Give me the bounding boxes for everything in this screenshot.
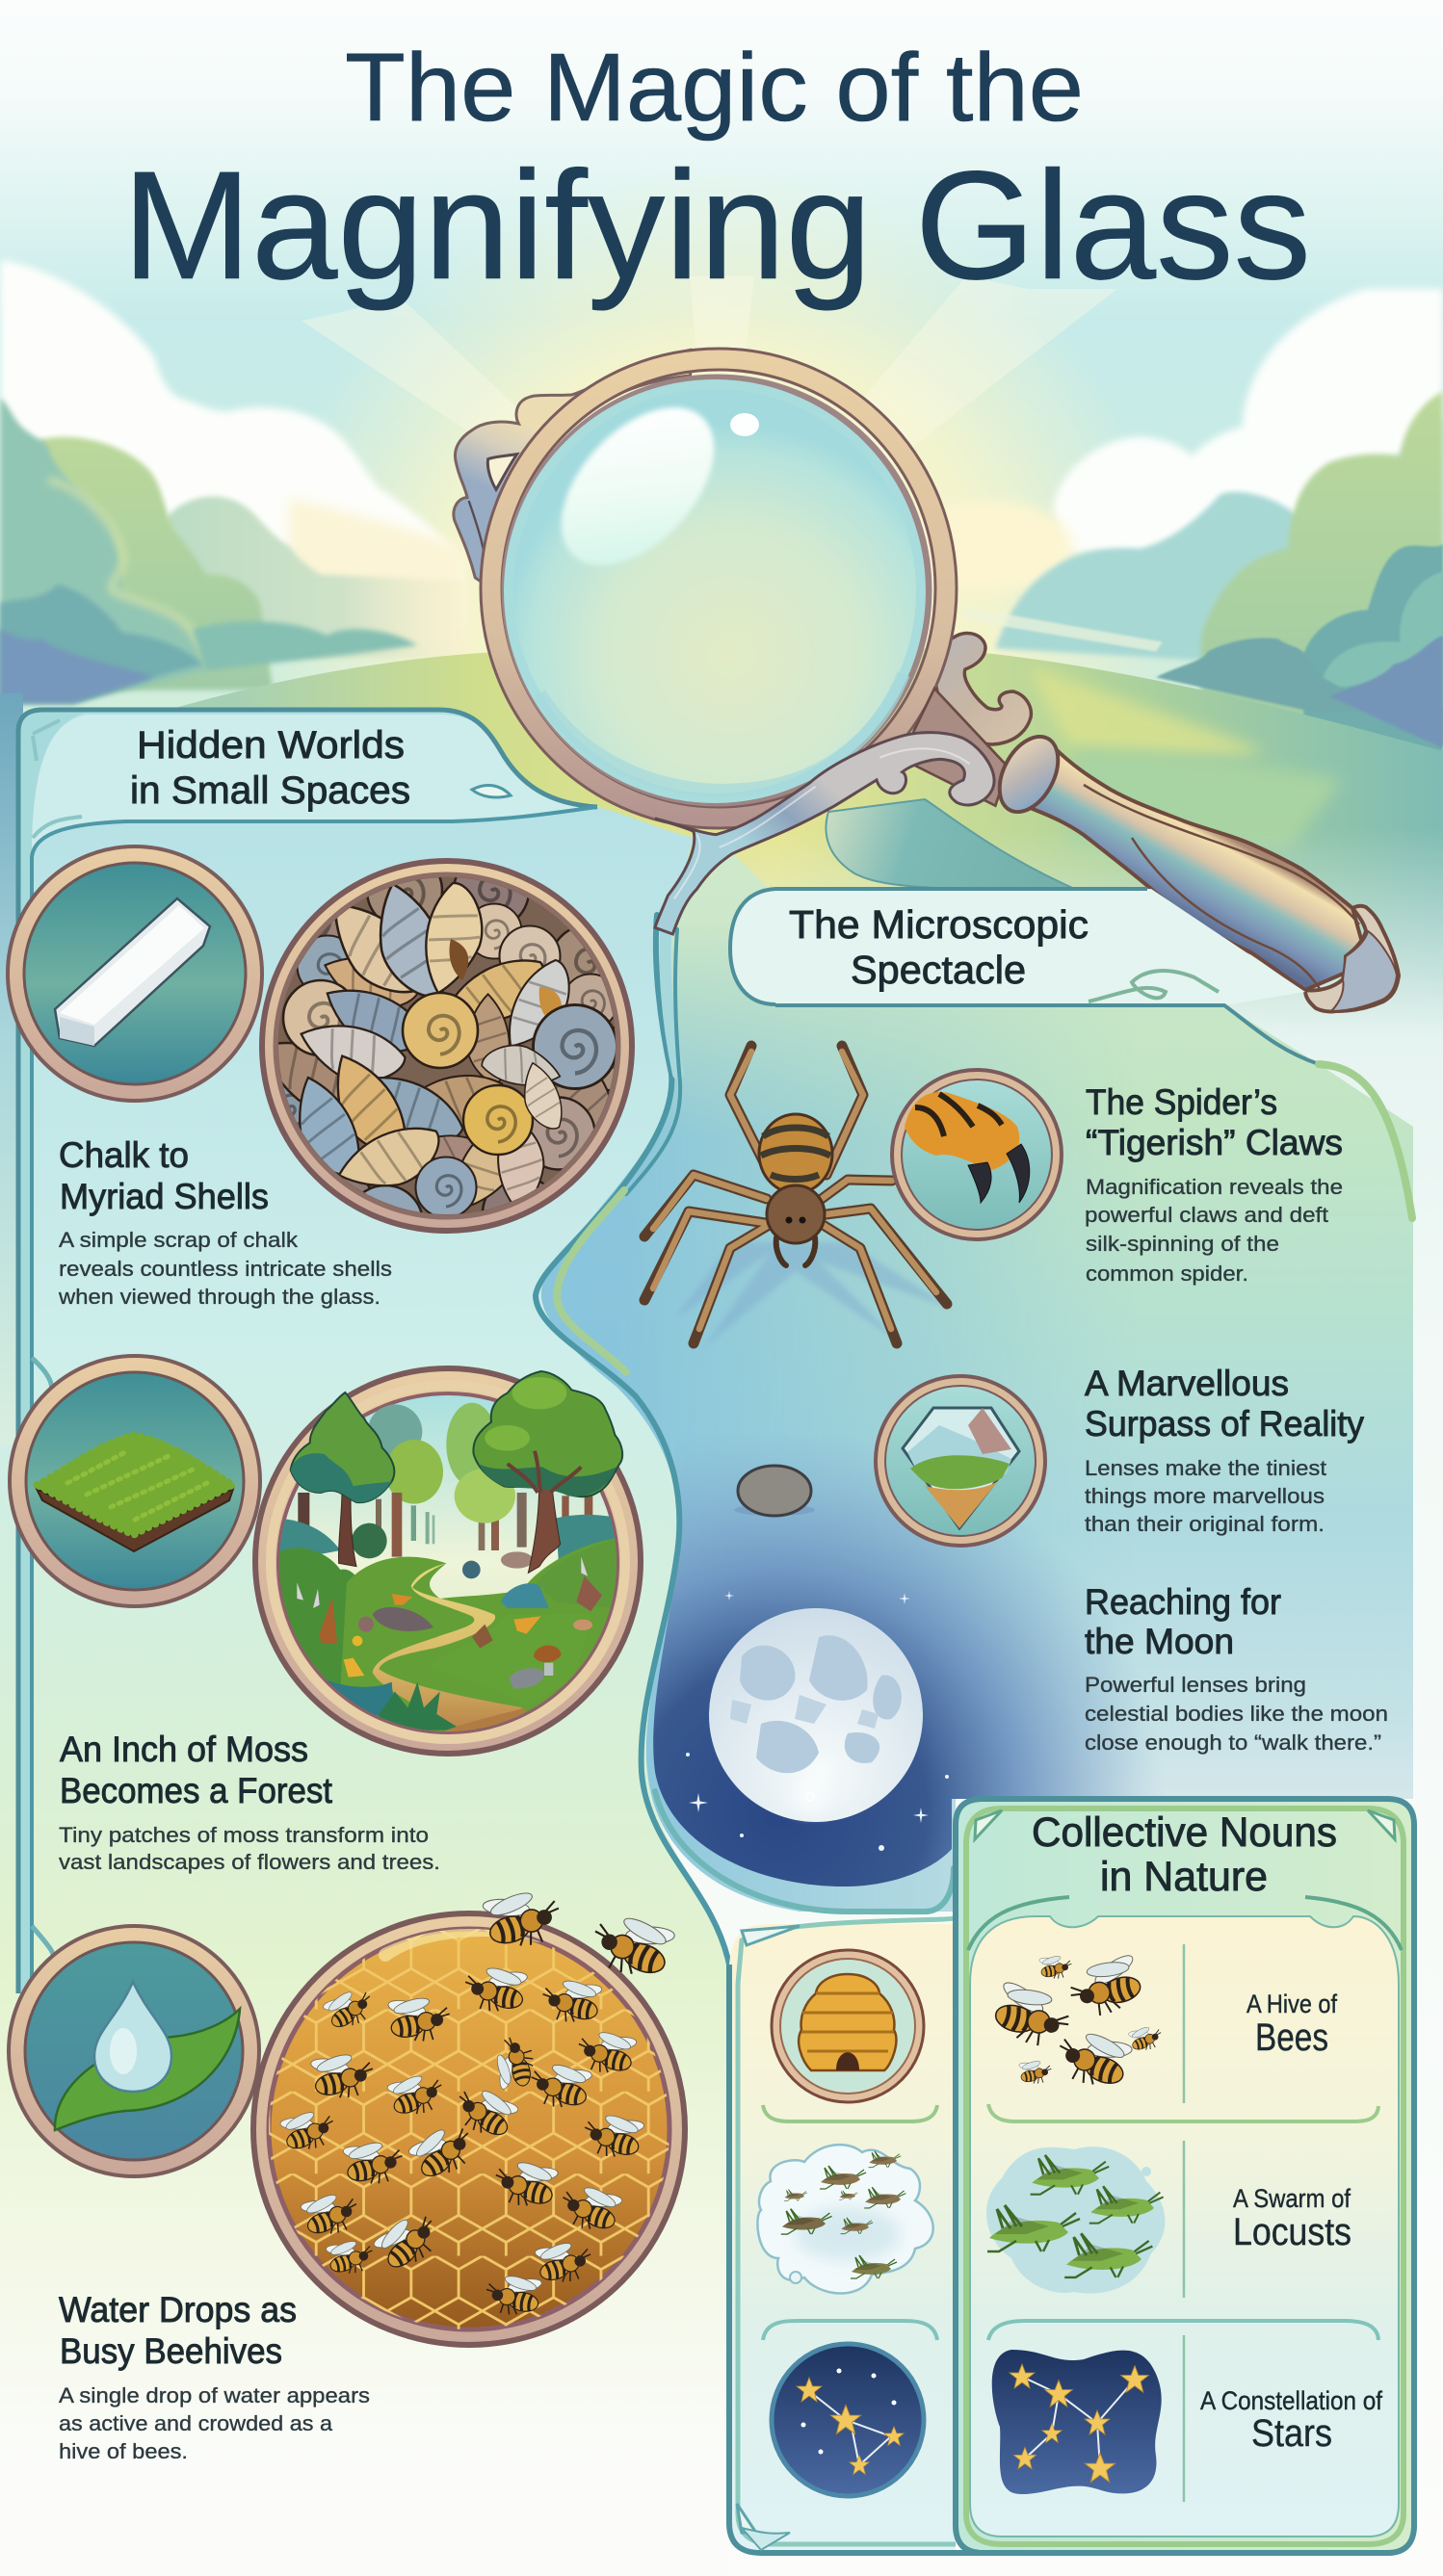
text block: the spider's tigerish claws: “Tigerish” Claws	[1086, 1123, 1343, 1162]
sky background	[0, 0, 1443, 1252]
text block: chalk to myriad shells	[58, 1135, 392, 1309]
right tree trunk and crown	[473, 1371, 622, 1573]
handle shaft	[1033, 746, 1368, 990]
text block: the spider's tigerish claws: common spider.	[1086, 1262, 1248, 1286]
icon: constellation circle	[772, 2344, 924, 2496]
text block: a marvellous surpass of reality: than their original form.	[1085, 1512, 1325, 1536]
icon: moss circle	[10, 1356, 260, 1606]
text block: chalk to myriad shells: when viewed through the glass.	[58, 1285, 380, 1309]
text block: moss becomes a forest: Tiny patches of moss transform into	[59, 1823, 429, 1847]
low teal ridge	[1156, 637, 1443, 744]
frame inner line	[32, 807, 597, 1984]
text block: water drops as busy beehives: hive of bees.	[59, 2439, 188, 2463]
scroll band and stem	[655, 689, 1009, 934]
text block: water drops as busy beehives: as active and crowded as a	[59, 2411, 332, 2435]
heading: collective nouns	[1032, 1809, 1337, 1900]
lens frame dark outline	[491, 359, 946, 818]
frame side band	[18, 710, 96, 1993]
blue foreground hill	[0, 629, 154, 703]
illustration: pebble	[734, 1466, 815, 1516]
clouds and hills: right landscape	[905, 289, 1443, 754]
text block: a marvellous surpass of reality: Lenses make the tiniest	[1085, 1456, 1327, 1480]
text block: the spider's tigerish claws: Magnification reveals the	[1086, 1175, 1343, 1199]
divider	[763, 2321, 937, 2340]
heading tab: the microscopic spectacle: The Microscopic	[789, 902, 1089, 947]
yellow rib highlight	[48, 480, 212, 664]
pale teal back hill	[995, 492, 1332, 667]
teal hill	[0, 398, 205, 703]
heading: hidden worlds	[130, 724, 410, 812]
heading tab: the microscopic spectacle: Spectacle	[851, 948, 1026, 992]
text block: water drops as busy beehives	[59, 2290, 370, 2463]
lens	[509, 384, 921, 798]
label: a hive of bees	[1246, 1990, 1337, 2059]
dark teal hill	[1303, 542, 1443, 754]
icon: gem circle	[876, 1376, 1045, 1546]
heading: collective nouns: in Nature	[1100, 1854, 1268, 1900]
handle end cap	[1305, 906, 1399, 1011]
green hill	[32, 437, 273, 690]
text block: a marvellous surpass of reality	[1085, 1364, 1364, 1536]
text block: the spider's tigerish claws: The Spider’s	[1086, 1082, 1277, 1122]
arc hill above microscopic tab	[826, 799, 1079, 891]
label: a constellation of stars	[1200, 2386, 1382, 2455]
icon: constellation blob	[992, 2350, 1162, 2494]
lower page backdrop	[0, 828, 1443, 2576]
text block: reaching for the moon	[1085, 1582, 1388, 1755]
bee on rim	[479, 1880, 566, 1955]
text block: chalk to myriad shells: Myriad Shells	[60, 1177, 269, 1216]
text block: the spider's tigerish claws	[1085, 1082, 1343, 1286]
lens glint	[730, 413, 759, 436]
lens inner rim shade	[539, 674, 904, 791]
heading tab: the microscopic spectacle	[730, 889, 1412, 1218]
divider	[763, 2105, 937, 2121]
lens highlight	[533, 379, 743, 593]
panel: beehive column	[729, 1918, 1414, 2553]
text block: the spider's tigerish claws: silk-spinning of the	[1086, 1232, 1279, 1256]
text block: reaching for the moon: Powerful lenses bring	[1085, 1673, 1306, 1697]
heading: hidden worlds: in Small Spaces	[130, 769, 410, 812]
dark teal hill	[0, 585, 202, 703]
cream haze near sun	[905, 501, 1072, 590]
text block: a marvellous surpass of reality: things more marvellous	[1085, 1484, 1325, 1508]
ground meadow	[0, 643, 1443, 1252]
icon: locust cloud	[986, 2147, 1165, 2294]
light ray	[963, 607, 1163, 652]
handle collar	[987, 727, 1070, 821]
text block: water drops as busy beehives: A single drop of water appears	[59, 2383, 370, 2407]
right cloud	[1053, 289, 1443, 552]
text block: water drops as busy beehives: Water Drops as	[59, 2290, 297, 2329]
label: a swarm of locusts	[1233, 2184, 1351, 2253]
icon: claw circle	[892, 1070, 1062, 1239]
illustration: spider	[644, 1046, 954, 1348]
heading tab shape	[32, 715, 597, 857]
upper left scroll ornament	[454, 350, 691, 590]
text block: chalk to myriad shells: A simple scrap of chalk	[59, 1228, 299, 1252]
panel: microscopic spectacle background	[541, 852, 1413, 1912]
blue foreground hill	[1329, 636, 1443, 748]
light teal hill	[1320, 571, 1443, 690]
text block: water drops as busy beehives: Busy Beehives	[60, 2331, 282, 2371]
illustration: forest	[255, 1368, 641, 1754]
upper right curl	[934, 633, 1031, 744]
frame outer line	[18, 710, 597, 1993]
illustration: honeycomb with bees	[251, 1880, 695, 2353]
icon: water drop circle	[9, 1926, 259, 2176]
yellow green hill	[1201, 392, 1443, 739]
cream haze near sun	[289, 498, 465, 652]
magnifying glass	[454, 350, 1399, 1011]
text block: moss becomes a forest: vast landscapes of flowers and trees.	[59, 1850, 440, 1874]
title: The Magic of the	[345, 34, 1084, 142]
text block: moss becomes a forest: An Inch of Moss	[60, 1730, 308, 1769]
label: a swarm of locusts: Locusts	[1233, 2211, 1351, 2253]
icon: chalk circle	[8, 846, 262, 1101]
left edge strip	[0, 693, 23, 1464]
panel: hidden worlds background	[0, 710, 729, 2576]
clouds and hills: left landscape	[0, 260, 465, 703]
left cloud	[0, 260, 462, 626]
heading: hidden worlds: Hidden Worlds	[137, 724, 405, 767]
icon: beehive	[772, 1950, 924, 2102]
text block: chalk to myriad shells: reveals countless intricate shells	[59, 1257, 392, 1281]
pale back hill	[161, 496, 465, 658]
cream content area	[970, 1916, 1399, 2537]
handle end cap face	[1331, 931, 1397, 1011]
row dividers	[988, 1944, 1378, 2502]
low teal ridge	[193, 621, 417, 671]
text block: reaching for the moon: close enough to “walk there.”	[1085, 1730, 1381, 1755]
stars around moon	[686, 1591, 949, 1851]
title	[122, 34, 1311, 311]
panel: collective nouns in nature	[956, 1799, 1414, 2553]
sunburst glow and rays	[265, 164, 1170, 1069]
illustration: moon	[709, 1608, 923, 1822]
text block: chalk to myriad shells: Chalk to	[59, 1135, 189, 1175]
icon: bees cluster	[988, 1949, 1165, 2095]
text block: a marvellous surpass of reality: Surpass of Reality	[1085, 1404, 1364, 1444]
left tree trunk and crown	[291, 1392, 394, 1567]
text block: moss becomes a forest	[59, 1730, 440, 1874]
title: Magnifying Glass	[122, 139, 1311, 311]
text block: reaching for the moon: celestial bodies like the moon	[1085, 1702, 1388, 1726]
text block: moss becomes a forest: Becomes a Forest	[60, 1771, 333, 1810]
handle contour lines	[1084, 785, 1359, 992]
bee on rim	[585, 1902, 680, 1986]
text block: a marvellous surpass of reality: A Marvellous	[1085, 1364, 1289, 1403]
label: a hive of bees: A Hive of	[1246, 1990, 1337, 2018]
label: a swarm of locusts: A Swarm of	[1233, 2184, 1351, 2213]
label: a hive of bees: Bees	[1255, 2017, 1328, 2059]
heading: collective nouns: Collective Nouns	[1032, 1809, 1337, 1856]
label: a constellation of stars: Stars	[1251, 2412, 1332, 2455]
icon: swarm cloud	[757, 2145, 933, 2294]
flowing vine lines between panels	[536, 915, 954, 1965]
text block: reaching for the moon: Reaching for	[1085, 1582, 1281, 1622]
lens frame inner band	[506, 378, 928, 802]
text block: the spider's tigerish claws: powerful claws and deft	[1085, 1203, 1329, 1227]
panel frame: hidden worlds	[18, 710, 597, 1993]
lens frame metal band	[491, 359, 946, 818]
label: a constellation of stars: A Constellation of	[1200, 2386, 1382, 2415]
text block: reaching for the moon: the Moon	[1085, 1622, 1234, 1661]
illustration: myriad shells	[259, 858, 635, 1234]
